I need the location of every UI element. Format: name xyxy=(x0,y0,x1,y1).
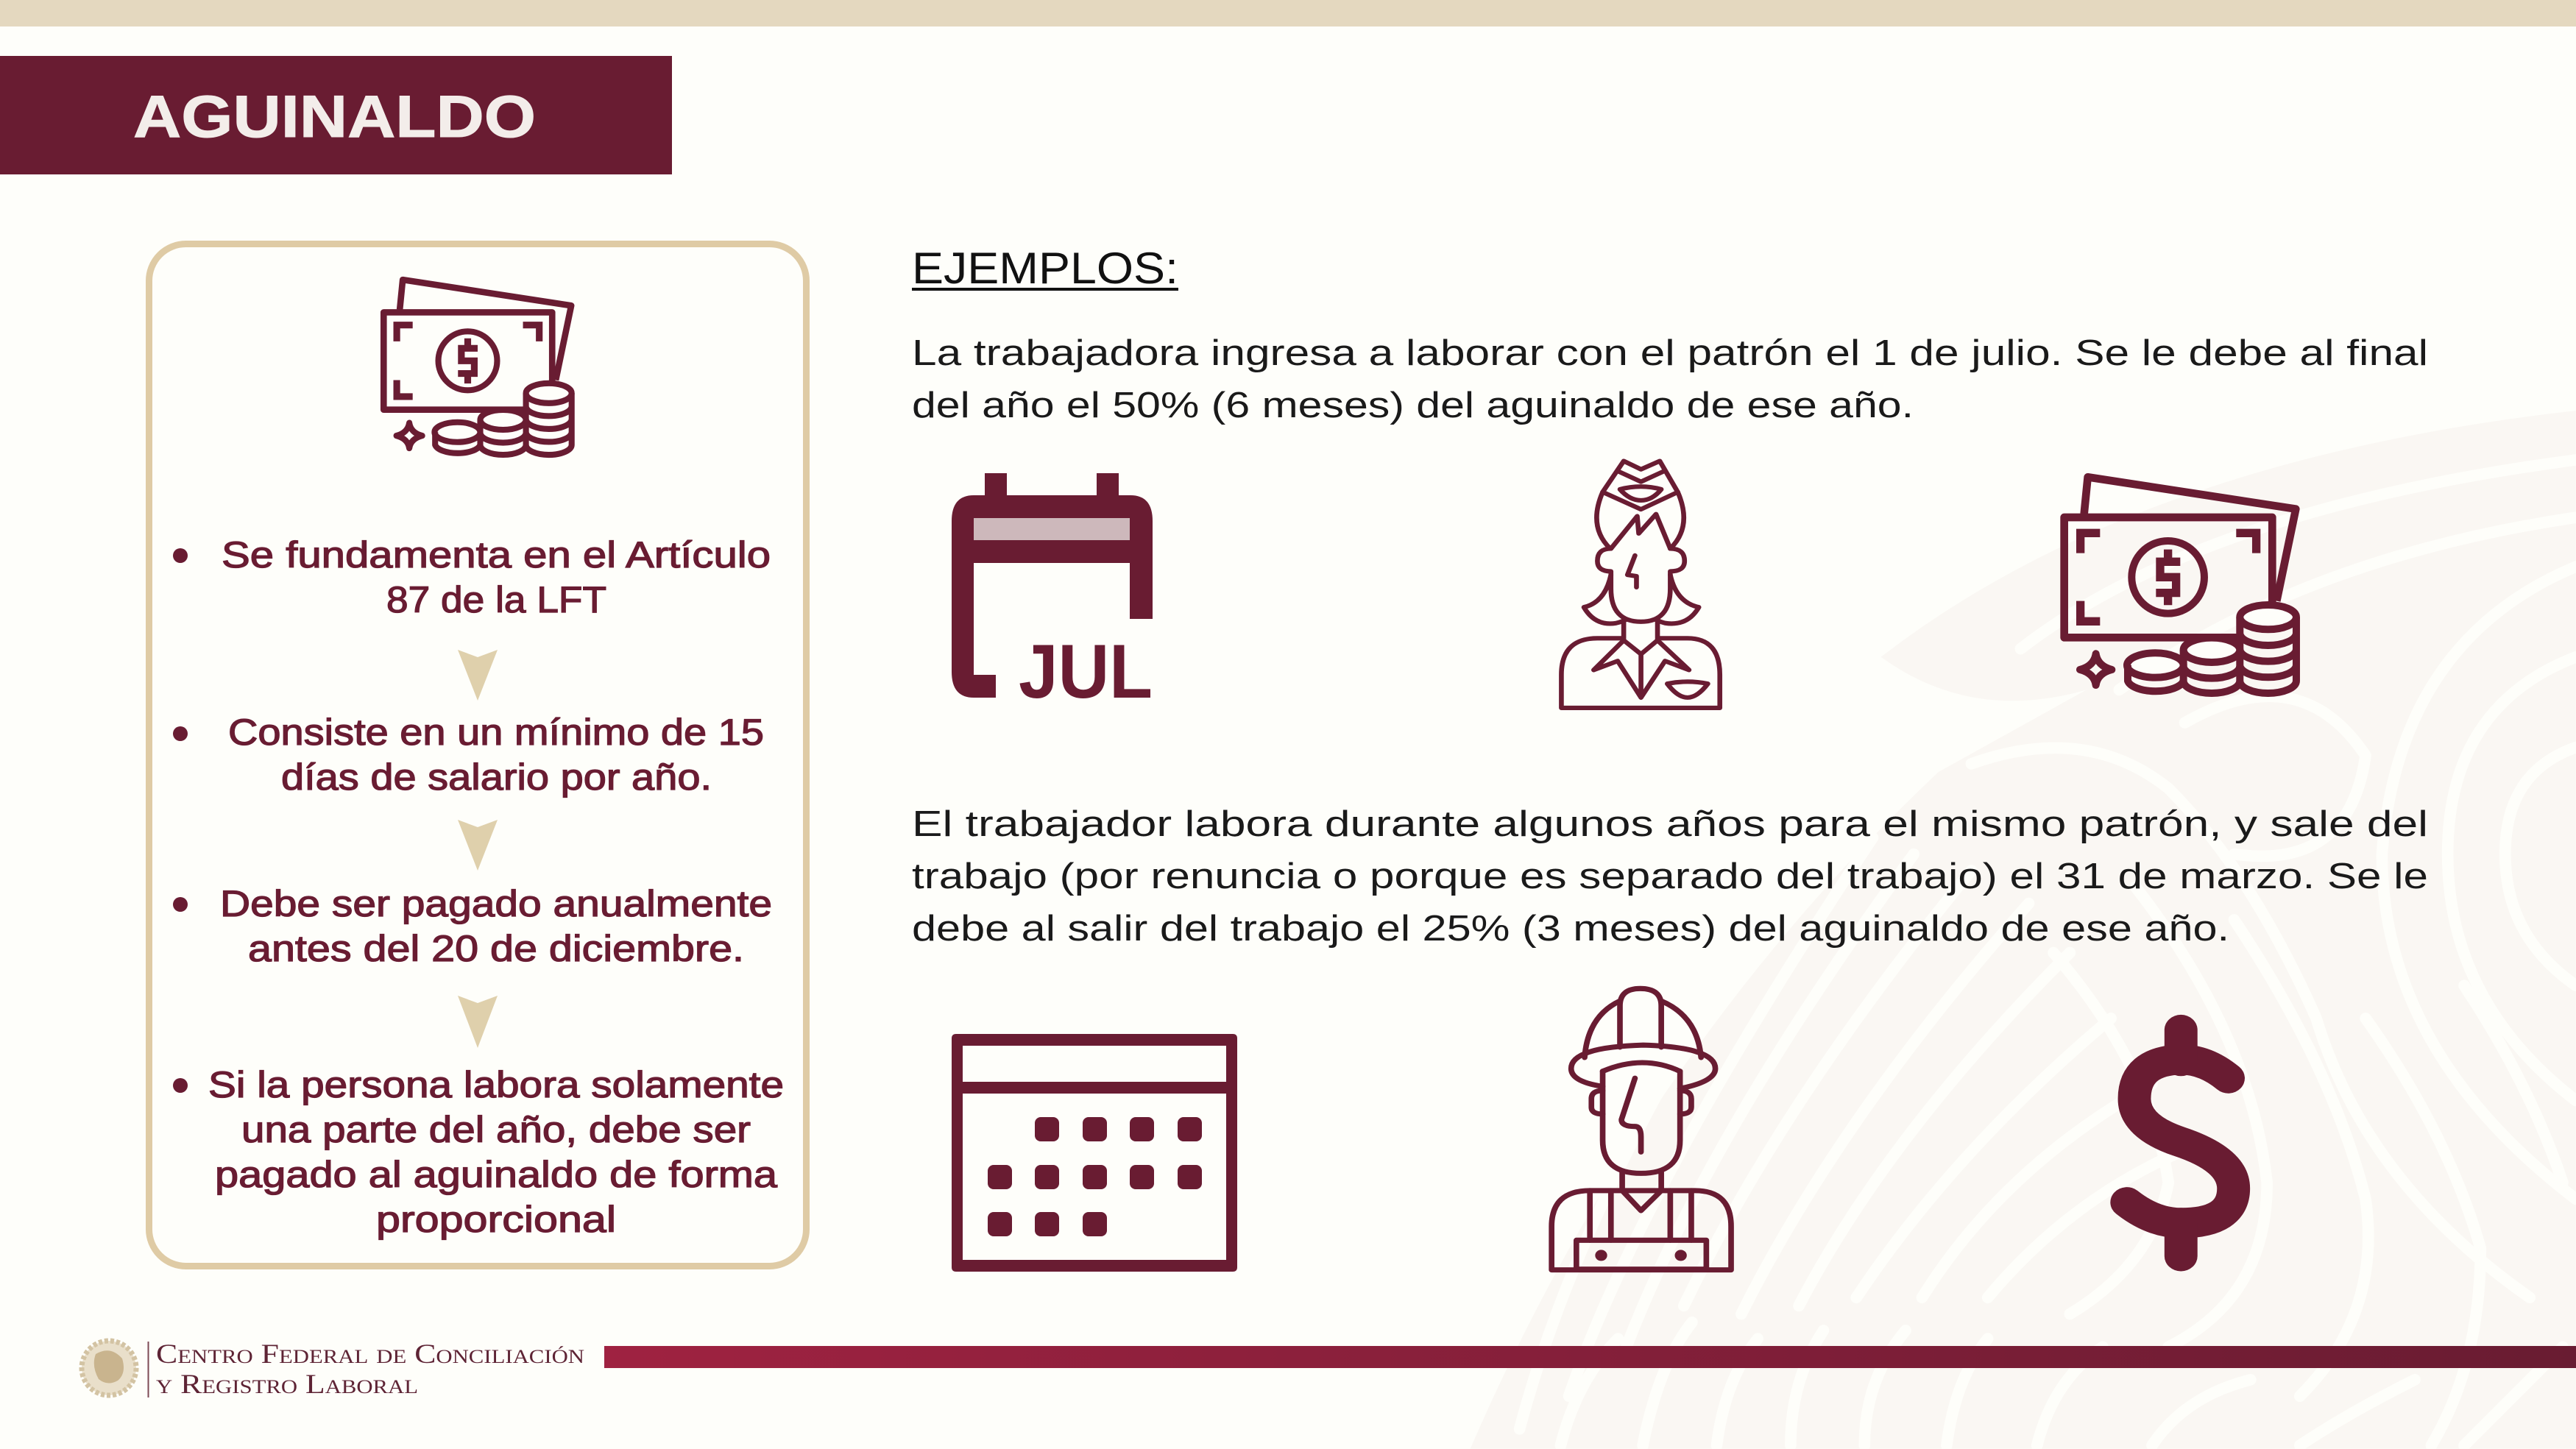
icon: july calendar: JUL xyxy=(1019,629,1153,715)
text: example 1: La trabajadora ingresa a laborar con el patrón el 1 de julio. Se le debe al final xyxy=(912,333,2428,373)
title banner xyxy=(0,56,672,174)
footer logo: y Registro Laboral xyxy=(156,1370,418,1400)
bullet list: Consiste en un mínimo de 15 xyxy=(228,712,764,753)
text: example 2: El trabajador labora durante algunos años para el mismo patrón, y sale del xyxy=(912,804,2428,844)
text: example 1 xyxy=(912,333,2428,425)
arrow 2 xyxy=(458,820,498,871)
bullet list: antes del 20 de diciembre. xyxy=(248,928,744,969)
bullet list: 87 de la LFT xyxy=(386,579,606,620)
text: example 1: del año el 50% (6 meses) del aguinaldo de ese año. xyxy=(912,386,1914,425)
footer logo xyxy=(82,1339,584,1400)
panel frame xyxy=(149,244,807,1266)
arrow 3 xyxy=(458,996,498,1048)
heading: ejemplos: EJEMPLOS: xyxy=(912,244,1178,293)
seal xyxy=(82,1341,136,1395)
bullet list: Si la persona labora solamente xyxy=(208,1064,784,1105)
bullet list: Debe ser pagado anualmente xyxy=(220,883,772,924)
bullet list: una parte del año, debe ser xyxy=(241,1109,751,1150)
bullet list xyxy=(173,534,784,1240)
bullet list: proporcional xyxy=(376,1199,616,1240)
icon: dollar sign xyxy=(2127,1030,2234,1256)
title banner: AGUINALDO xyxy=(133,84,536,150)
bullet list: pagado al aguinaldo de forma xyxy=(215,1154,777,1195)
bullet list: Se fundamenta en el Artículo xyxy=(222,534,771,575)
icon: calendar grid xyxy=(952,1034,1237,1272)
top band xyxy=(0,0,2576,26)
organisation name: Centro Federal de Conciliación xyxy=(156,1339,584,1370)
text: example 2: debe al salir del trabajo el 25% (3 meses) del aguinaldo de ese año. xyxy=(912,909,2229,949)
footer bar xyxy=(604,1346,2576,1368)
arrow 1 xyxy=(458,650,498,701)
text: example 2 xyxy=(912,804,2428,949)
panel: aguinaldo rules xyxy=(149,244,807,1266)
icon: flight attendant xyxy=(1561,461,1720,708)
icon: construction worker xyxy=(1551,988,1731,1270)
icon: july calendar xyxy=(952,473,1153,715)
watermark: national emblem pattern xyxy=(1471,411,2576,1449)
text: example 2: trabajo (por renuncia o porque es separado del trabajo) el 31 de marzo. Se le xyxy=(912,857,2428,896)
icon: money and coins large xyxy=(2064,477,2296,693)
icon: money and coins xyxy=(383,280,572,455)
bullet list: días de salario por año. xyxy=(281,757,712,798)
